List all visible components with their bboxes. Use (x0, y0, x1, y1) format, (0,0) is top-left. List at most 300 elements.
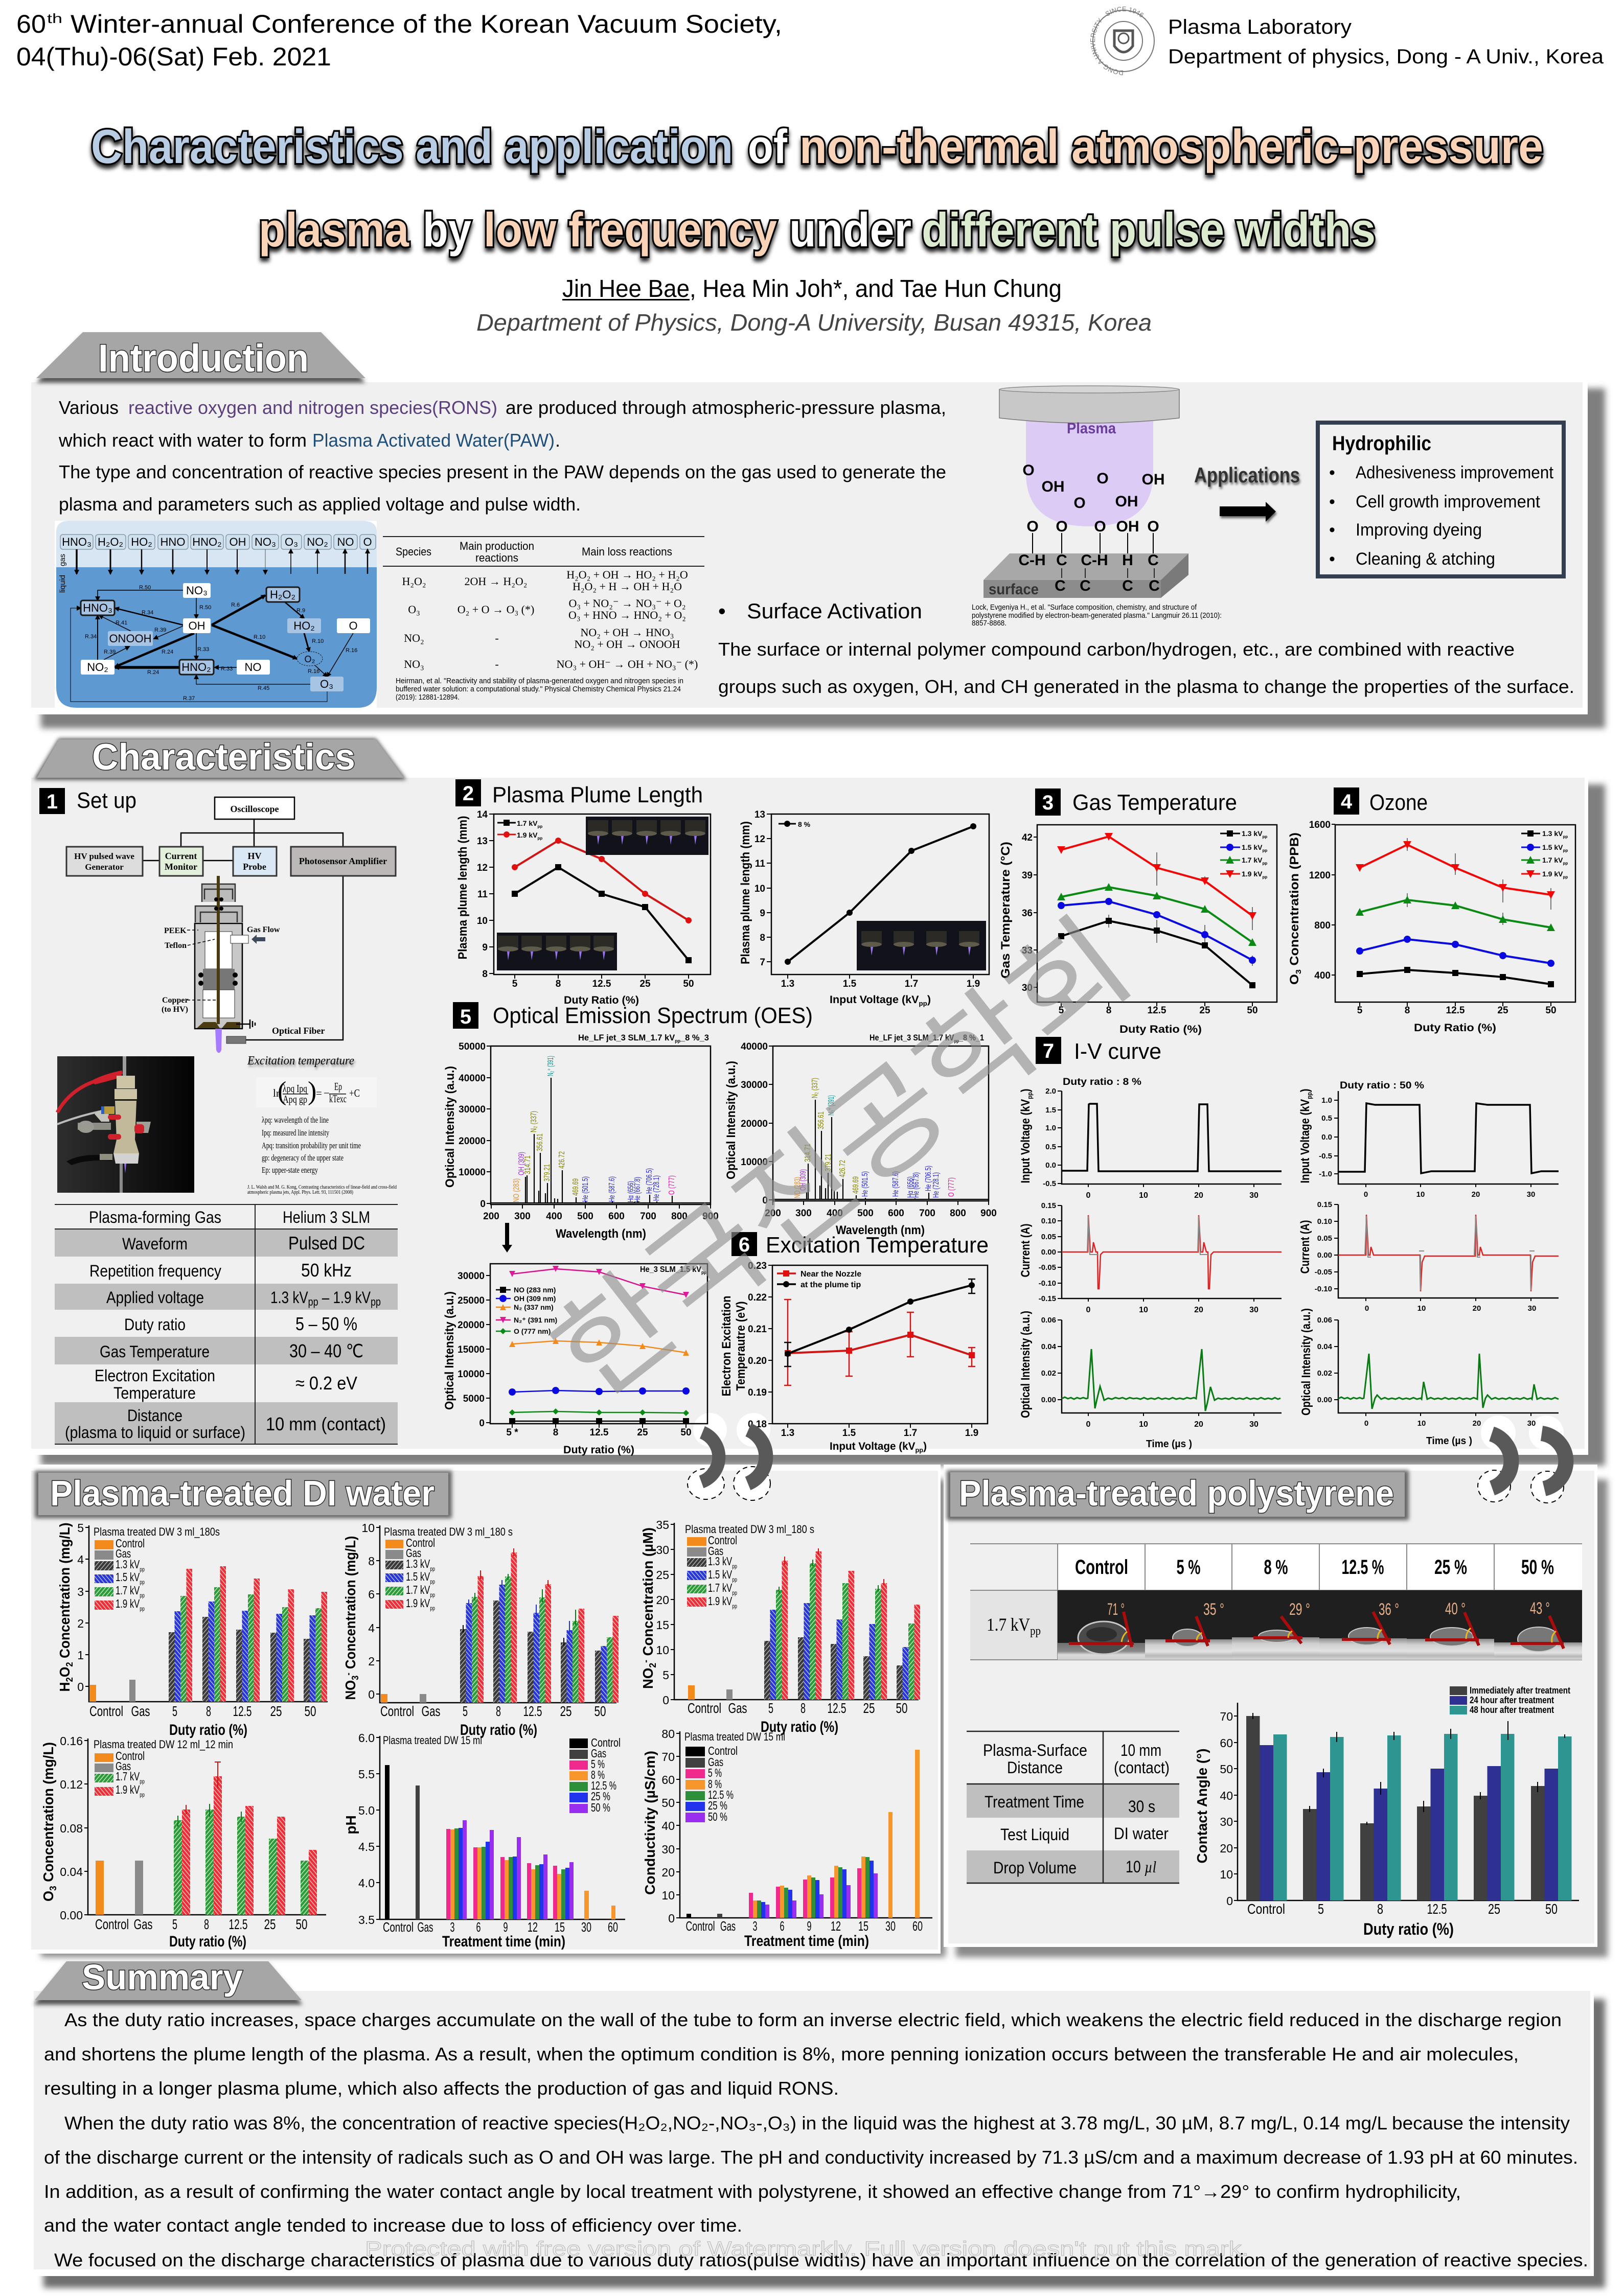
chart: electron excitation temperature: 0.20 (748, 1356, 767, 1366)
diagram: experimental setup: Probe (243, 862, 266, 872)
photo: control droplet: 71 ° (1107, 1600, 1125, 1618)
table: reactive species reactions: Main loss reactions (582, 545, 672, 558)
formula: excitation temperature: ( (278, 1077, 286, 1106)
chart: contact angle over time: Contact Angle (°) (1194, 1749, 1210, 1863)
title (91, 120, 1543, 257)
diagram: plasma surface activation: C (1055, 577, 1066, 594)
chart: OES spectrum right: 10000 (741, 1157, 768, 1168)
diagram: plasma surface activation: surface (989, 581, 1039, 598)
photo: 12.5 percent droplet (1319, 1590, 1407, 1660)
decoration: continuation hooks right (1478, 1433, 1566, 1503)
laboratory header: Department of physics, Dong - A Univ., Korea (1168, 45, 1604, 68)
table: treatment conditions: Test Liquid (1000, 1825, 1069, 1844)
chart: H2O2 concentration: 1 (77, 1649, 84, 1662)
chart: NO2 concentration: pp (732, 1576, 737, 1583)
chart: OES spectrum right: He (706.5) (924, 1166, 933, 1191)
text: surface citation: Lock, Evgeniya H., et al. "Surface composition, chemistry, and structure of (972, 603, 1197, 612)
table: plasma conditions: Duty ratio (124, 1315, 186, 1334)
chart: conductivity: 20 (661, 1866, 675, 1879)
chart: I-V waveform duty ratio 50 percent: 0.04 (1317, 1342, 1333, 1351)
chart: OES spectrum left: 200 (483, 1211, 499, 1222)
panel: hydrophilic applications: Adhesiveness improvement (1356, 463, 1554, 482)
diagram: experimental setup (66, 797, 396, 1053)
chart: OES spectrum left: Wavelength (nm) (556, 1227, 646, 1241)
diagram: plasma surface activation: O (1073, 495, 1086, 512)
text: summary paragraphs: In addition, as a result of confirming the water contact angle by local treatment with polystyrene, it showed an effective change from 71°→29° to confirm hydrophilicity, (44, 2181, 1461, 2202)
chart: ozone concentration: 1.9 kV (1542, 870, 1563, 878)
chart: pH: Control (591, 1736, 621, 1749)
chart: I-V waveform duty ratio 8 percent: 0.10 (1041, 1217, 1056, 1225)
chart: I-V waveform duty ratio 8 percent: 0.04 (1041, 1342, 1057, 1351)
text: summary paragraphs: When the duty ratio was 8%, the concentration of reactive species(H₂O₂,NO₂-,NO₃-,O₃) in the liquid was the highest at 3.78 mg/L, 30 µM, 8.7 mg/L, 0.14 mg/L because the intensity (64, 2113, 1570, 2133)
formula: excitation temperature: ) (308, 1077, 316, 1106)
chart: NO3 concentration: Control (406, 1536, 435, 1549)
watermark: Korean Vacuum Society: 한국진공학회 (530, 896, 1153, 1422)
chart: conductivity: 6 (780, 1918, 784, 1934)
chart: I-V waveform duty ratio 8 percent: Current (A) (1019, 1223, 1033, 1278)
chart: reaction network diagram: R.33 (221, 666, 233, 672)
chart: electron excitation temperature: at the plume tip (800, 1281, 861, 1289)
chart: O3 concentration: 0.04 (60, 1865, 83, 1878)
chart: I-V waveform duty ratio 50 percent: 0.0 (1321, 1133, 1332, 1142)
chart: NO2 concentration: 12.5 (827, 1700, 847, 1716)
chart: pH: Gas (591, 1747, 606, 1760)
heading: 1 Set up: Set up (77, 788, 136, 813)
chart: conductivity: 3 (752, 1918, 758, 1934)
chart: gas temperature: pp (1262, 834, 1267, 839)
text: summary paragraphs: As the duty ratio increases, space charges accumulate on the wall of the tube to form an inverse electric field, which weakens the electric field reduced in the discharge region (64, 2009, 1562, 2030)
chart: contact angle over time: 30 (1220, 1815, 1233, 1828)
chart: ozone concentration: 1.3 kV (1542, 829, 1563, 838)
table: plasma conditions: 30 – 40 ℃ (289, 1340, 363, 1361)
chart: OES spectrum right: N₂⁺ (391) (827, 1095, 836, 1116)
chart: gas temperature: Duty Ratio (%) (1119, 1024, 1202, 1035)
chart: NO2 concentration: 35 (656, 1518, 669, 1532)
table: reactive species reactions: O₃ (408, 603, 420, 616)
chart: NO3 concentration: Plasma treated DW 3 ml_180 s (384, 1525, 513, 1538)
chart: I-V waveform duty ratio 8 percent: pp (1026, 1092, 1034, 1099)
diagram: experimental setup: Copper (162, 996, 189, 1005)
table: plasma conditions: Applied voltage (106, 1288, 204, 1307)
chart: conductivity: Plasma treated DW 15 ml (684, 1730, 785, 1743)
chart: species intensity vs duty ratio: 25 (637, 1427, 648, 1438)
panel: hydrophilic applications: • (1329, 520, 1335, 540)
chart: I-V waveform duty ratio 8 percent: 30 (1249, 1306, 1259, 1314)
chart: OES spectrum left: _8 %_3 (680, 1033, 709, 1042)
table: reactive species reactions: NO₃ + OH⁻ → OH + NO₃⁻ (*) (557, 658, 698, 670)
chart: I-V waveform duty ratio 8 percent: Optical Intensity (a.u.) (1019, 1311, 1033, 1418)
table: treatment conditions: 30 s (1128, 1797, 1155, 1816)
chart: plume length vs duty ratio: 10 (477, 916, 488, 926)
chart: gas temperature: pp (1262, 861, 1267, 866)
arrow: to applications (1220, 502, 1276, 522)
conference header (16, 10, 782, 71)
chart: plume length vs duty ratio: Plasma plume length (mm) (456, 816, 470, 960)
panel: hydrophilic applications: Cell growth improvement (1356, 492, 1541, 512)
chart: O3 concentration: pp (140, 1791, 145, 1798)
chart: conductivity: Gas (720, 1918, 736, 1934)
chart: reaction network diagram: HO₂ (131, 536, 152, 548)
table: plasma conditions: Temperature (113, 1384, 196, 1402)
chart: plume length vs voltage: pp (919, 1000, 927, 1007)
chart: NO3 concentration: 8 (496, 1703, 501, 1719)
photo: 25 percent droplet (1407, 1590, 1494, 1660)
chart: OES spectrum right (724, 1033, 997, 1237)
chart: OES spectrum left: Hα (656) (627, 1181, 635, 1202)
chart: pH: 15 (555, 1919, 565, 1935)
chart: contact angle over time: 12.5 (1427, 1901, 1447, 1917)
chart: O3 concentration: Duty ratio (%) (169, 1933, 246, 1950)
table: plasma conditions: Waveform (122, 1235, 188, 1253)
chart: NO2 concentration: 8 (800, 1700, 806, 1716)
chart: OES spectrum left: 0 (480, 1199, 486, 1210)
chart: I-V waveform duty ratio 50 percent: Input Voltage (kV (1298, 1084, 1312, 1184)
chart: I-V waveform duty ratio 50 percent: -0.5 (1319, 1152, 1332, 1161)
chart: contact angle over time: Duty ratio (%) (1363, 1920, 1454, 1938)
chart: electron excitation temperature: 0.19 (748, 1387, 767, 1398)
chart: plume length vs duty ratio: pp (537, 824, 542, 829)
heading: Characteristics tab (34, 737, 406, 780)
chart: NO2 concentration: 5 (768, 1700, 773, 1716)
chart: NO2 concentration (640, 1518, 920, 1735)
chart: O3 concentration: O (40, 1890, 56, 1901)
chart: pH: 5 % (591, 1757, 605, 1771)
chart: OES spectrum left: 379.21 (543, 1164, 552, 1181)
table: reactive species reactions: Main production (460, 540, 534, 552)
chart: O3 concentration: 1.9 kV (116, 1783, 149, 1796)
chart: NO3 concentration: 25 (560, 1703, 571, 1719)
laboratory header: Plasma Laboratory (1168, 16, 1352, 38)
chart: I-V waveform duty ratio 8 percent: -0.5 (1043, 1179, 1056, 1188)
decoration: continuation hooks left (688, 1430, 770, 1500)
chart: OES spectrum left: 20000 (459, 1136, 486, 1147)
chart: NO3 concentration: 1.7 kV (406, 1583, 439, 1596)
table: plasma conditions: Distance (127, 1406, 182, 1425)
chart: contact angle over time: 0 (1226, 1894, 1233, 1908)
chart: conductivity: 70 (661, 1750, 675, 1764)
chart: conductivity: 12.5 % (708, 1788, 734, 1801)
chart: gas temperature: 36 (1022, 908, 1033, 919)
formula: excitation temperature: Apq: transition probability per unit time (262, 1141, 361, 1150)
chart: NO3 concentration: Duty ratio (%) (460, 1722, 537, 1738)
table: reactive species reactions: - (495, 632, 499, 644)
chart: I-V waveform duty ratio 8 percent: ) (1019, 1088, 1033, 1092)
chart: reaction network diagram: R.37 (183, 695, 195, 702)
chart: ozone concentration: 12.5 (1446, 1005, 1465, 1016)
formula: excitation temperature: gp: degeneracy of the upper state (262, 1153, 344, 1163)
chart: conductivity: Gas (708, 1755, 723, 1769)
heading: 7 I-V curve: I-V curve (1074, 1039, 1161, 1064)
chart: I-V waveform duty ratio 8 percent: 30 (1249, 1420, 1259, 1429)
chart: I-V waveform duty ratio 50 percent: Time (µs ) (1426, 1435, 1472, 1447)
chart: OES spectrum right: 30000 (741, 1080, 768, 1091)
chart: electron excitation temperature: pp (915, 1446, 923, 1454)
chart: OES spectrum left: 356.61 (536, 1133, 544, 1151)
photo: 8 percent droplet (1232, 1590, 1319, 1660)
chart: O3 concentration: 12.5 (229, 1916, 247, 1932)
table: contact angle photos: Control (1075, 1556, 1128, 1579)
chart: species intensity vs duty ratio: He_3 SLM_1.5 kV (640, 1265, 707, 1274)
text: surface activation: • (718, 599, 726, 623)
diagram: experimental setup: Optical Fiber (272, 1026, 325, 1036)
text: RONS and PAW paragraph: reactive oxygen and nitrogen species(RONS) (128, 397, 497, 418)
heading: 1 Set up: 1 (47, 791, 58, 813)
chart: contact angle over time: 60 (1220, 1736, 1233, 1750)
chart: OES spectrum right: 200 (765, 1208, 781, 1219)
chart: ozone concentration: 1200 (1309, 870, 1331, 881)
chart: OES spectrum right: 0 (762, 1195, 768, 1206)
chart: plume length vs voltage: 7 (760, 957, 765, 968)
chart: I-V waveform duty ratio 8 percent: 10 (1139, 1191, 1148, 1200)
formula: excitation temperature: ln (273, 1087, 282, 1099)
chart: pH: 25 % (591, 1790, 610, 1803)
chart: I-V waveform duty ratio 8 percent: -0.05 (1039, 1263, 1056, 1272)
table: contact angle photos (970, 1544, 1582, 1660)
chart: ozone concentration: pp (1563, 875, 1568, 879)
chart: H2O2 concentration: pp (140, 1592, 145, 1599)
chart: NO3 concentration: 8 (368, 1555, 375, 1568)
text: RONS and PAW paragraph: The type and concentration of reactive species present in the PAW depends on the gas used to generate the (59, 461, 946, 482)
chart: pH: 50 % (591, 1801, 610, 1814)
chart: reaction network diagram: R.39 (154, 627, 166, 633)
chart: reaction network diagram: OH (188, 619, 205, 632)
chart: species intensity vs duty ratio: 15000 (458, 1344, 485, 1355)
formula: excitation temperature (247, 1054, 397, 1195)
chart: pH: Control (383, 1919, 414, 1935)
text: surface activation: Surface Activation (747, 599, 922, 623)
chart: OES spectrum right: OH (309) (799, 1169, 808, 1191)
table: treatment conditions: 10 mm (1120, 1741, 1161, 1759)
chart: conductivity: 15 (858, 1918, 868, 1934)
chart: ozone concentration: 8 (1405, 1005, 1410, 1016)
chart: plume length vs voltage (739, 809, 989, 1007)
chart: H2O2 concentration: 2 (64, 1662, 75, 1667)
chart: NO3 concentration: 1.9 kV (406, 1596, 439, 1610)
chart: gas temperature: 25 (1199, 1005, 1210, 1016)
chart: OES spectrum right: Wavelength (nm) (836, 1223, 925, 1237)
chart: electron excitation temperature: Input Voltage (kV (830, 1441, 917, 1452)
chart: H2O2 concentration: pp (140, 1605, 145, 1612)
chart: pH: 4.5 (358, 1840, 375, 1853)
chart: H2O2 concentration: pp (140, 1566, 145, 1573)
chart: gas temperature: pp (1262, 875, 1267, 879)
chart: OES spectrum left: Optical Intensity (a.u.) (443, 1066, 457, 1188)
chart: plume length vs duty ratio (456, 809, 711, 1006)
chart: H2O2 concentration: 3 (77, 1585, 84, 1598)
chart: ozone concentration: pp (1563, 848, 1568, 853)
diagram: plasma surface activation: C (1080, 577, 1091, 594)
table: contact angle photos: 5 % (1177, 1556, 1200, 1579)
chart: species intensity vs duty ratio: 20000 (458, 1320, 485, 1331)
panel: plasma-treated polystyrene (944, 1465, 1608, 1957)
chart: OES spectrum right: 20000 (741, 1119, 768, 1129)
chart: NO2 concentration: Duty ratio (%) (761, 1719, 838, 1735)
panel: plasma-treated DI water (26, 1465, 946, 1957)
table: reactive species reactions: NO₂ + OH → HNO₃ (581, 626, 674, 639)
text: surface citation: 8857-8868. (972, 619, 1007, 628)
chart: plume length vs duty ratio: 1.9 kV (517, 831, 537, 839)
panel: characteristics (26, 737, 1605, 1466)
chart: I-V waveform duty ratio 50 percent: 10 (1416, 1190, 1425, 1199)
table: reactive species reactions: O₃ + HNO → HNO₂ + O₂ (568, 609, 686, 621)
chart: NO2 concentration: 10 (656, 1643, 669, 1657)
chart: ozone concentration: pp (1563, 834, 1568, 839)
chart: electron excitation temperature (720, 1261, 988, 1454)
chart: reaction network diagram: R.16 (346, 647, 357, 654)
chart: OES spectrum right: He (587.6) (891, 1171, 900, 1197)
chart: ozone concentration: 1600 (1309, 820, 1331, 830)
chart: gas temperature: 1.5 kV (1242, 843, 1262, 851)
heading: 2 Plasma Plume Length: 2 (463, 782, 474, 805)
chart: reaction network diagram: H₂O₂ (270, 588, 295, 601)
chart: I-V waveform duty ratio 8 percent: 0 (1086, 1306, 1091, 1314)
chart: H2O2 concentration: 2 (64, 1677, 75, 1682)
chart: OES spectrum right: pp (954, 1038, 959, 1043)
diagram: plasma surface activation: O (1026, 518, 1039, 535)
formula: excitation temperature: − (324, 1087, 330, 1099)
chart: H2O2 concentration: 0 (77, 1680, 84, 1694)
chart: H2O2 concentration: H (57, 1681, 73, 1691)
formula: excitation temperature: λpq: wavelength of the line (262, 1115, 329, 1125)
chart: conductivity: 30 (661, 1843, 675, 1856)
chart: plume length vs voltage: 12 (754, 834, 765, 845)
table: plasma conditions: Pulsed DC (288, 1233, 365, 1254)
chart: species intensity vs duty ratio: 5000 (463, 1394, 485, 1404)
table: contact angle photos: 50 % (1521, 1556, 1554, 1579)
chart: NO3 concentration: 3 (350, 1676, 360, 1680)
chart: H2O2 concentration: O (57, 1667, 73, 1677)
chart: I-V waveform duty ratio 50 percent: -0.05 (1315, 1268, 1332, 1277)
chart: NO3 concentration: pp (430, 1605, 435, 1612)
chart: electron excitation temperature: 0.23 (748, 1261, 767, 1271)
chart: ozone concentration: 50 (1545, 1005, 1557, 1016)
heading: Introduction tab: Introduction (98, 337, 309, 380)
chart: O3 concentration: 0.12 (60, 1778, 83, 1791)
chart: NO3 concentration: pp (430, 1591, 435, 1598)
chart: pH: Plasma treated DW 15 ml (383, 1734, 482, 1747)
conference header: 04(Thu)-06(Sat) Feb. 2021 (16, 42, 331, 71)
chart: plume length vs voltage: 1.5 (843, 979, 857, 989)
chart: OES spectrum left: He (587.6) (608, 1176, 616, 1202)
text: summary paragraphs: We focused on the discharge characteristics of plasma due to various duty ratios(pulse widths) have an important influence on the correlation of the generation of reactive species. (54, 2249, 1588, 2270)
chart: pH: 8 % (591, 1768, 605, 1781)
chart: reaction network diagram: OH (229, 536, 246, 548)
chart: OES spectrum left: N₂ (337) (530, 1111, 538, 1132)
chart: reaction network diagram: NO₃ (186, 584, 208, 597)
chart: OES spectrum left: 10000 (459, 1167, 486, 1178)
chart: reaction network diagram: R.50 (139, 585, 151, 591)
title: of (748, 120, 788, 173)
chart: I-V waveform duty ratio 8 percent: Time (µs ) (1146, 1439, 1192, 1450)
chart: I-V waveform duty ratio 50 percent: 0 (1365, 1304, 1369, 1313)
chart: species intensity vs duty ratio: 30000 (458, 1271, 485, 1282)
chart: OES spectrum left (443, 1033, 719, 1241)
chart: OES spectrum left: OH (309) (517, 1152, 526, 1175)
chart: OES spectrum left: He (501.5) (581, 1176, 590, 1202)
chart: pH (343, 1731, 625, 1950)
heading: Plasma-treated DI water: Plasma-treated DI water (50, 1473, 434, 1513)
formula: excitation temperature: J. L. Walsh and M. G. Kong, Contrasting characteristics of linear-field and cross-field (247, 1185, 397, 1190)
chart: plume length vs voltage: 1.3 (781, 979, 794, 989)
chart: I-V waveform duty ratio 8 percent: 0.15 (1041, 1201, 1056, 1210)
table: reactive species reactions: reactions (475, 551, 518, 564)
chart: I-V waveform duty ratio 50 percent: 20 (1473, 1304, 1481, 1313)
chart: I-V waveform duty ratio 8 percent: 0.5 (1045, 1143, 1056, 1151)
chart: reaction network diagram: HO₂ (293, 619, 315, 632)
heading: 7 I-V curve: 7 (1043, 1040, 1054, 1062)
table: plasma conditions: – 1.9 kV (318, 1288, 371, 1307)
chart: NO3 concentration: - (343, 1673, 353, 1676)
chart: H2O2 concentration: 1.7 kV (116, 1584, 149, 1597)
chart: NO3 concentration: 6 (368, 1588, 375, 1601)
chart: NO3 concentration: NO (342, 1678, 358, 1700)
chart: OES spectrum right: O (777) (947, 1177, 956, 1197)
chart: NO2 concentration: NO (640, 1667, 656, 1689)
formula: excitation temperature: +C (349, 1087, 360, 1099)
decoration: white circles behind hooks (693, 1413, 1564, 1450)
chart: NO2 concentration: 50 (896, 1700, 908, 1716)
table: plasma conditions: pp (371, 1295, 381, 1308)
chart: O3 concentration: Concentration (mg/L) (40, 1742, 56, 1886)
chart: ozone concentration: 3 (1294, 969, 1303, 974)
diagram: plasma surface activation: OH (1142, 471, 1164, 488)
chart: I-V waveform duty ratio 8 percent: Input Voltage (kV (1019, 1084, 1033, 1184)
table: contact angle photos: pp (1030, 1625, 1041, 1638)
chart: contact angle over time: Immediately after treatment (1470, 1685, 1570, 1696)
chart: pH: 3.5 (358, 1913, 375, 1927)
chart: OES spectrum right: 426.72 (838, 1160, 847, 1177)
chart: I-V waveform duty ratio 50 percent: 30 (1527, 1419, 1536, 1428)
chart: plume length vs duty ratio: 9 (482, 942, 488, 953)
chart: species intensity vs duty ratio: 0 (479, 1418, 485, 1429)
chart: OES spectrum left: 900 (702, 1211, 719, 1222)
chart: gas temperature: 1.7 kV (1242, 856, 1262, 864)
chart: OES spectrum right: 300 (795, 1208, 812, 1219)
chart: pH: pH (343, 1815, 359, 1835)
chart: conductivity: 8 % (708, 1777, 722, 1791)
chart: reaction network diagram: NO (337, 536, 354, 548)
chart: electron excitation temperature: 0.22 (748, 1292, 767, 1303)
chart: O3 concentration: 0.08 (60, 1822, 83, 1835)
diagram: experimental setup: (to HV) (162, 1005, 188, 1014)
chart: OES spectrum right: He (667.8) (912, 1172, 921, 1198)
formula: excitation temperature: Ipq: measured line intensity (262, 1128, 329, 1138)
diagram: plasma surface activation: C-H (1081, 552, 1108, 569)
chart: plume length vs duty ratio: Duty Ratio (%) (564, 994, 639, 1006)
chart: pH: 60 (608, 1919, 618, 1935)
chart: NO2 concentration: 0 (662, 1694, 669, 1707)
chart: OES spectrum right: 379.21 (824, 1154, 833, 1171)
chart: OES spectrum left: 800 (671, 1211, 688, 1222)
table: plasma conditions: ≈ 0.2 eV (295, 1373, 357, 1394)
title: Characteristics and application (91, 120, 733, 173)
table: treatment conditions: (contact) (1114, 1758, 1170, 1777)
chart: contact angle over time: 8 (1377, 1901, 1383, 1917)
chart: gas temperature: 42 (1022, 832, 1033, 843)
title: low frequency (484, 203, 777, 257)
chart: OES spectrum right: 469.69 (852, 1176, 860, 1194)
panel: hydrophilic applications: Cleaning & atching (1356, 549, 1495, 569)
chart: OES spectrum right: 900 (980, 1208, 997, 1219)
chart: NO2 concentration: Control (688, 1700, 721, 1716)
heading: Introduction tab (36, 332, 365, 383)
title: plasma (259, 203, 409, 257)
chart: plume length vs duty ratio: 8 (556, 979, 561, 989)
chart: ozone concentration: Concentration (PPB) (1288, 832, 1301, 969)
chart: species intensity vs duty ratio (443, 1264, 707, 1456)
table: reactive species reactions: - (495, 658, 499, 670)
chart: pH: 3 (450, 1919, 455, 1935)
